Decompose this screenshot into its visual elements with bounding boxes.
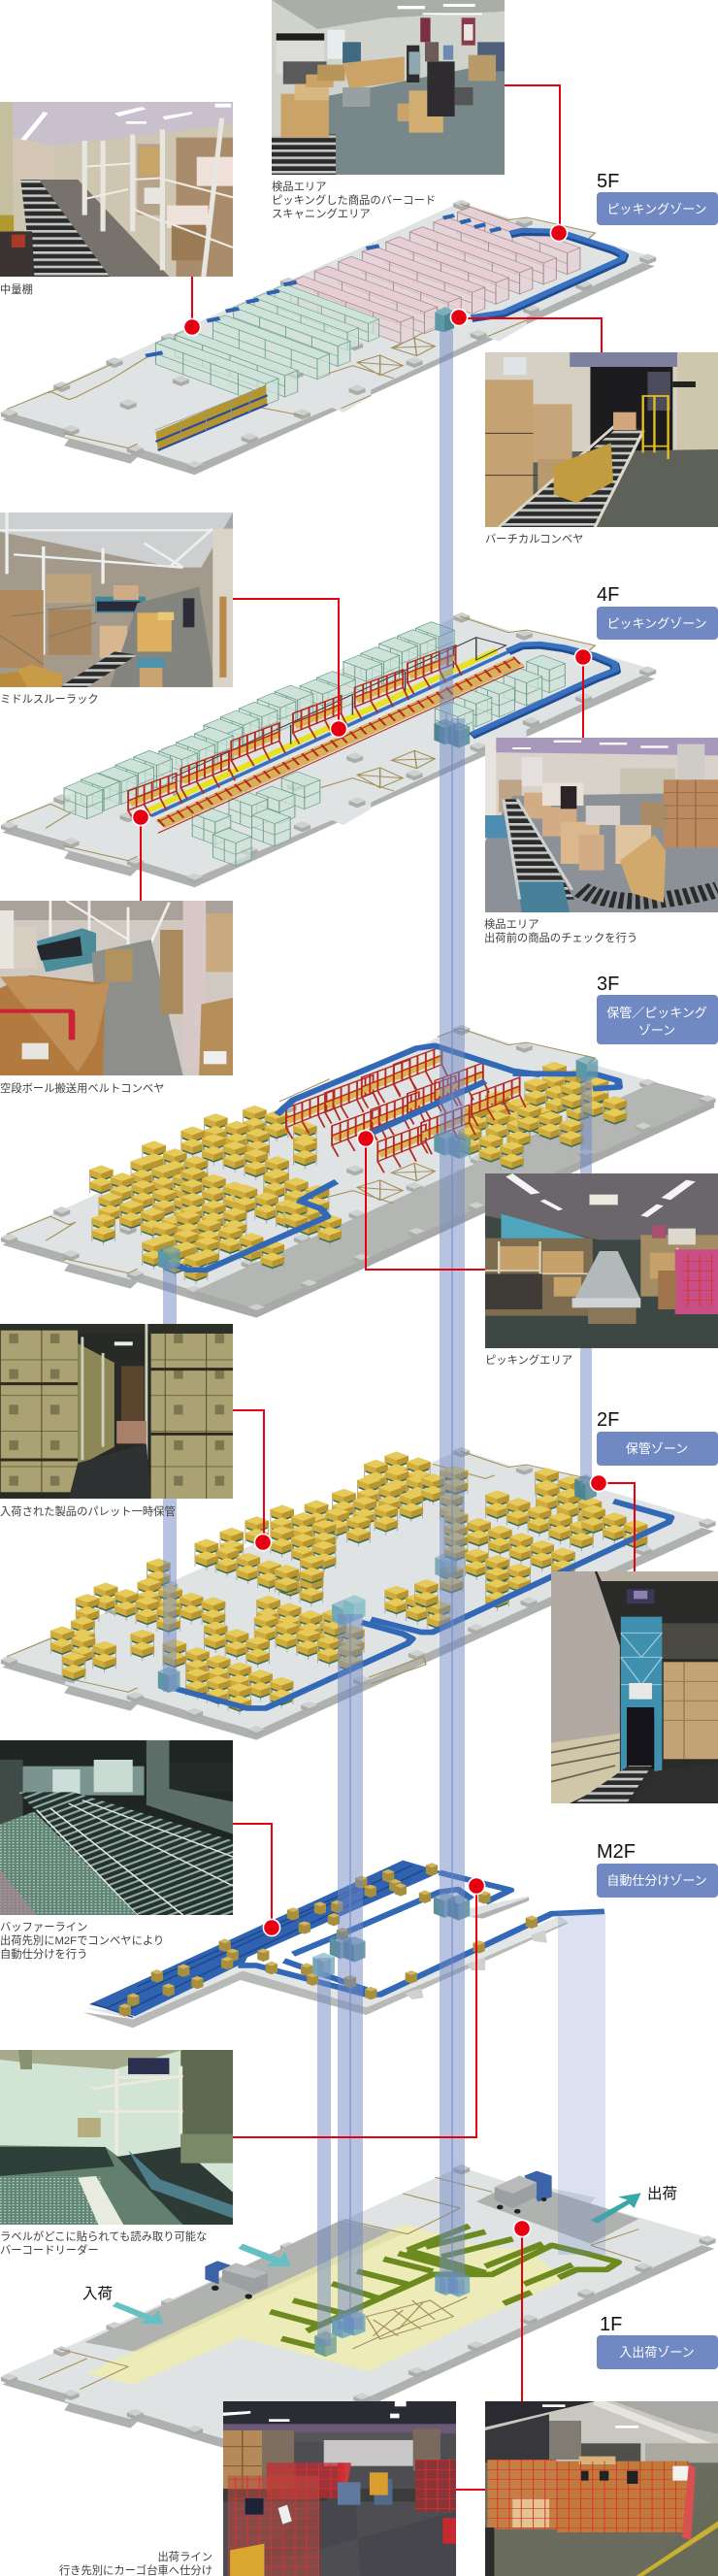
zone label 2F: 保管ゾーン	[626, 1441, 688, 1456]
captions: 中量棚	[0, 282, 33, 296]
yellow and blue sorter line	[142, 650, 508, 816]
photo: shipping line	[223, 2401, 456, 2576]
captions: 入荷された製品のパレット一時保管	[0, 1504, 176, 1518]
zone label M2F	[597, 1841, 718, 1898]
captions: 検品エリア	[484, 917, 539, 931]
green shelf units lower	[192, 655, 565, 866]
conveyor 5F	[472, 230, 624, 318]
yellow flow rack	[155, 385, 268, 450]
captions: ピッキングした商品のバーコード	[272, 193, 436, 207]
captions: 出荷ライン	[157, 2551, 212, 2563]
truck outbound	[495, 2171, 552, 2214]
lift 5F	[435, 307, 454, 332]
yellow mezzanine	[87, 2225, 566, 2385]
photo: tall vertical lift	[551, 1571, 718, 1803]
zone label 1F: 入出荷ゾーン	[619, 2345, 695, 2360]
captions: 空段ボール搬送用ベルトコンベヤ	[0, 1081, 164, 1095]
pallet stacks upper group	[50, 1452, 464, 1684]
floor 2F: storage zone layout	[1, 1447, 716, 1740]
lift 4F	[434, 719, 470, 748]
dark grey extension area	[195, 1082, 716, 1318]
captions: ラベルがどこに貼られても読み取り可能な	[0, 2229, 207, 2243]
captions: バーコードリーダー	[0, 2243, 99, 2257]
photo: vertical conveyor	[485, 352, 718, 527]
captions: スキャニングエリア	[272, 207, 371, 220]
zone label 1F: 1F	[600, 2314, 622, 2335]
floor 3F: storage and picking layout	[1, 1025, 716, 1318]
lifts 2F	[158, 1474, 597, 1693]
pallet stacks right group	[458, 1062, 627, 1172]
lifts 1F	[314, 2269, 470, 2357]
zone label 5F: ピッキングゾーン	[606, 202, 707, 216]
captions: ピッキングエリア	[485, 1353, 572, 1367]
zone label 3F: 保管／ピッキング	[606, 1006, 707, 1020]
captions: ミドルスルーラック	[0, 693, 99, 706]
conveyors 2F	[177, 1502, 670, 1708]
arrow out	[591, 2193, 641, 2224]
photo: picking area 3F	[485, 1173, 718, 1348]
captions: バーチカルコンベヤ	[485, 533, 583, 545]
zone label 4F: ピッキングゾーン	[606, 616, 707, 631]
captions: 自動仕分けを行う	[0, 1947, 87, 1961]
zone label M2F: M2F	[597, 1841, 636, 1863]
arrow in 1	[113, 2302, 164, 2324]
leader lines	[141, 85, 635, 2490]
captions: 出荷先別にM2Fでコンベヤにより	[0, 1934, 164, 1947]
zone label 2F	[597, 1409, 718, 1466]
black frame and upper red racks	[128, 638, 506, 822]
pallet stacks right group	[384, 1467, 647, 1633]
captions: 検品エリア	[272, 180, 326, 193]
pallet stacks left group	[89, 1106, 342, 1284]
photo: inspection area 5F	[272, 0, 505, 175]
zone label 5F	[597, 171, 718, 225]
conveyor 4F	[472, 644, 616, 736]
arrow in 2	[238, 2244, 291, 2266]
wide buffer conveyor	[89, 1861, 441, 2017]
tan cartons	[119, 1863, 538, 2017]
conveyor loops	[238, 1872, 604, 1995]
zone label 3F: ゾーン	[638, 1023, 675, 1038]
captions: 出荷前の商品のチェックを行う	[484, 931, 637, 944]
zone label 1F	[597, 2314, 718, 2369]
blue rack end boxes	[146, 215, 501, 356]
grey structural deck	[82, 1896, 568, 2028]
captions: バッファーライン	[0, 1921, 87, 1933]
pallet stacks lower group	[163, 1596, 365, 1715]
zone label 2F: 2F	[597, 1409, 619, 1431]
photo: pallet storage	[0, 1324, 233, 1499]
inbound label: 入荷	[82, 2285, 113, 2302]
truck dock bands	[84, 2181, 638, 2352]
zone label 3F: 3F	[597, 974, 619, 995]
vertical shaft bars	[163, 330, 605, 2346]
photo: buffer line	[0, 1740, 233, 1915]
pink picking racks	[291, 207, 580, 344]
green conveyors	[270, 2226, 618, 2347]
photo: cargo carts	[485, 2401, 718, 2576]
floor 4F: picking zone layout	[1, 612, 656, 887]
red racks 3F	[286, 1046, 526, 1172]
photo: barcode reader	[0, 2050, 233, 2225]
lower red racks	[155, 657, 524, 833]
floor M2F: automatic sorting conveyors	[82, 1861, 604, 2028]
photo: empty carton belt conveyor	[0, 901, 233, 1075]
zone label 5F: 5F	[597, 171, 619, 192]
photo: medium shelving	[0, 102, 233, 277]
truck inbound	[205, 2261, 268, 2299]
floor 1F: receiving and shipping layout	[1, 2164, 716, 2458]
floor 5F: picking zone layout	[1, 200, 656, 475]
lifts M2F	[312, 1892, 470, 1978]
zone label 3F	[597, 974, 718, 1044]
red location markers	[132, 224, 607, 2237]
zone label 4F	[597, 584, 718, 640]
green shelf units upper	[64, 622, 454, 819]
zone label 4F: 4F	[597, 584, 619, 606]
outbound label: 出荷	[647, 2185, 677, 2202]
photo: middle flow-through rack	[0, 512, 233, 687]
photo: 4F inspection area	[485, 738, 718, 912]
green picking racks	[155, 284, 379, 405]
conveyors 3F	[177, 1045, 619, 1270]
lifts 3F	[158, 1055, 598, 1271]
zone label M2F: 自動仕分けゾーン	[606, 1873, 707, 1888]
